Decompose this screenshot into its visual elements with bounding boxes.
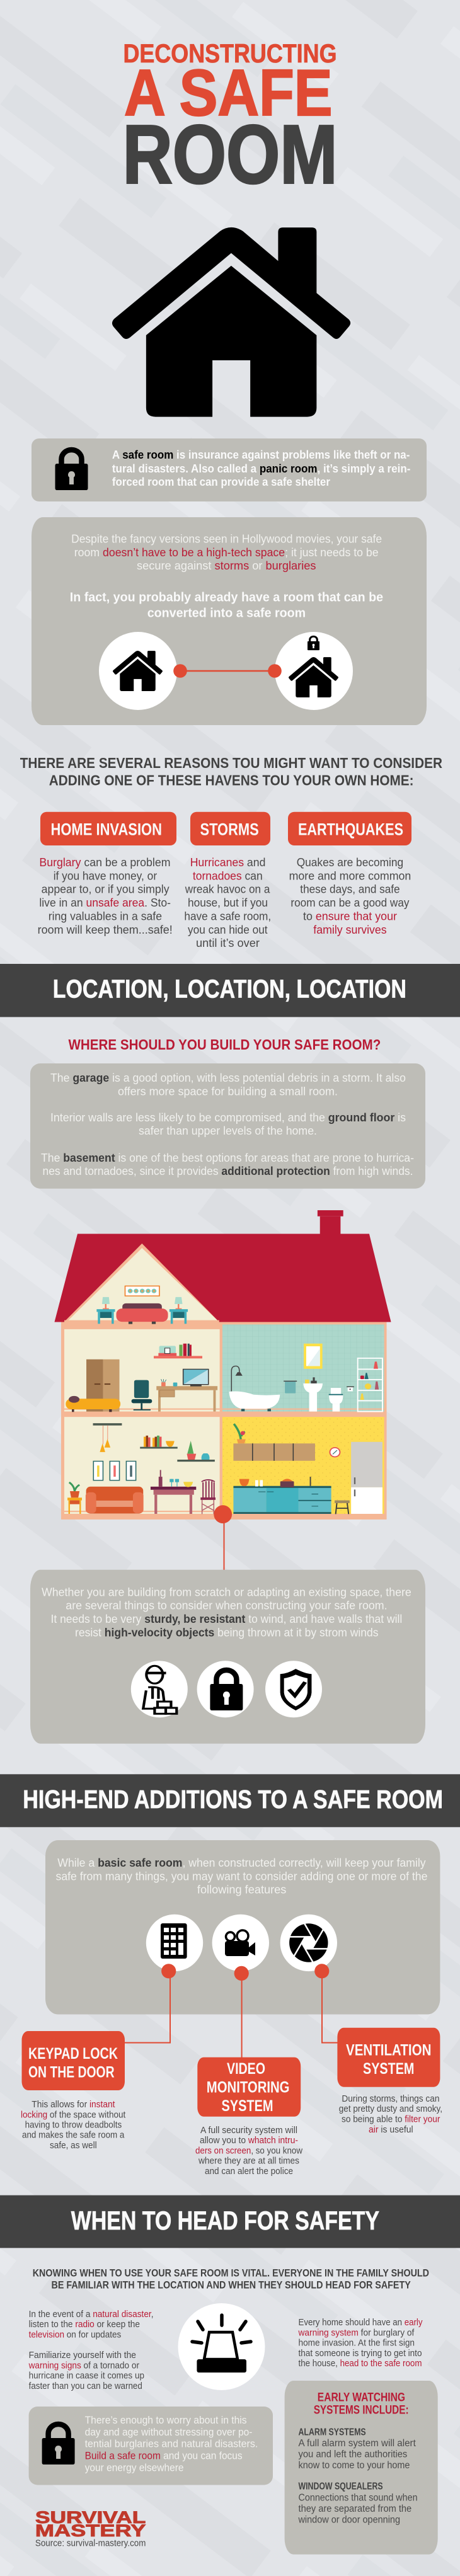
label box [197,2058,301,2117]
text: alarm systems: you and left the authorities [299,2449,408,2460]
text: hollywood paragraph [71,533,382,572]
text: burglary: live in an unsafe area. Sto- [39,896,171,909]
heading: EARLY WATCHING [318,2391,405,2404]
text: early warning advice: Every home should have an early [299,2318,423,2328]
title: DECONSTRUCTING [124,38,336,68]
text: burglary [38,856,173,936]
label box: MONITORING [207,2079,290,2097]
panel: video monitoring [195,2058,302,2177]
logo: survival mastery: MASTERY [35,2521,146,2540]
text: video: where they are at all times [198,2156,299,2166]
text: quakes: more and more common [289,869,411,883]
panel: safe room definition [32,438,427,501]
text: alarm systems: A full alarm system will alert [299,2438,416,2449]
label box: KEYPAD LOCK [28,2045,118,2063]
text: definition: tural disasters. Also called a panic room, it’s simply a rein- [112,462,410,475]
text: additions intro: While a basic safe room, when constructed correctly, will keep your family [57,1857,426,1869]
panel: storms [184,812,271,949]
panel: additions intro [45,1840,440,2015]
text: ventilation [339,2094,442,2135]
icon: keypad [146,1915,203,1971]
connectors: features [125,1964,338,2058]
button [288,812,411,845]
text: hollywood paragraph: room doesn’t have to be a high-tech space; it just needs to be [74,546,379,559]
text: hollywood paragraph: secure against storms or burglaries [137,559,316,572]
bathroom [229,1344,382,1412]
panel: early watching systems [285,2381,438,2555]
text: construction advice: resist high-velocity objects being thrown at it by strom winds [75,1626,379,1639]
icon: padlock [42,2424,75,2464]
panel: hollywood versions [32,517,427,725]
label box [21,2031,125,2090]
text: alarm systems: know to come to your home [299,2460,410,2471]
label box: SYSTEM [363,2060,414,2078]
section band: location [0,964,460,1017]
text: natural disaster advice: television on for updates [29,2330,121,2340]
icon: padlock [55,450,88,490]
panel: home invasion [38,812,176,936]
text: natural disaster advice: faster than you can be warned [29,2381,142,2391]
text: natural disaster advice: warning signs of a tornado or [28,2361,139,2371]
text: hurricanes: tornadoes can [193,869,263,883]
text: keypad: locking of the space without [21,2110,125,2120]
text: closing advice: Build a safe room and you can focus [85,2451,243,2462]
panel: earthquakes [288,812,411,936]
text: garage: The garage is a good option, with less potential debris in a storm. It also [50,1072,406,1084]
text: natural disaster advice: hurricane in caase it comes up [29,2371,144,2381]
text: video [195,2126,302,2177]
text: hurricanes: you can hide out [188,923,268,936]
text: quakes: these days, and safe [300,883,400,896]
text: hurricanes: Hurricanes and [190,856,265,869]
text: hollywood paragraph: Despite the fancy versions seen in Hollywood movies, your safe [71,533,382,546]
panel: where to build [30,1063,425,1189]
text: basement [41,1152,414,1177]
text: definition [112,449,410,488]
section band: when to head for safety [0,2195,460,2248]
kitchen [233,1424,382,1514]
text: keypad: and makes the safe room a [22,2131,125,2141]
button: STORMS [200,820,259,839]
logo: survival mastery [35,2508,146,2549]
icon: aperture vent [280,1915,337,1971]
text: closing advice: tential burglaries and natural disasters. [85,2438,258,2449]
title: A SAFE [124,57,333,130]
icon: builder [131,1661,188,1717]
text: hurricanes: house, but if you [188,896,268,909]
text: hurricanes: have a safe room, [184,910,271,922]
label box: VIDEO [227,2060,265,2078]
heading: where to build: WHERE SHOULD YOU BUILD YOUR SAFE ROOM? [68,1036,381,1053]
roof and chimney [54,1210,391,1322]
text: window squealers [298,2482,418,2526]
text: quakes: Quakes are becoming [297,856,403,869]
text: alarm systems [299,2427,416,2471]
text: quakes: room can be a good way [290,896,410,909]
text: keypad: having to throw deadbolts [25,2120,122,2130]
text: ventilation: get pretty dusty and smoky, [339,2104,442,2114]
text: additions intro: safe from many things, you may want to consider adding one or more of the [55,1870,427,1882]
text: additions intro: following features [197,1884,286,1896]
text: burglary: ring valuables in a safe [49,910,162,922]
text: video: and can alert the police [205,2167,293,2177]
text: video: ders on screen, so you know [195,2146,302,2156]
button [40,812,176,845]
text: window squealers: window or door openning [298,2515,400,2526]
connector: house to construction panel [214,1505,232,1570]
text: ventilation: air is useful [369,2125,413,2135]
text: early warning advice: warning system for burglary of [298,2328,415,2338]
text: keypad: This allows for instant [32,2100,115,2110]
text: keypad: safe, as well [50,2141,97,2151]
panel: keypad lock [21,2031,125,2151]
text: interior walls: Interior walls are less likely to be compromised, and the ground floor is [50,1111,406,1124]
heading: knowing when [33,2267,429,2291]
icon: siren [178,2303,265,2390]
text: ventilation: so being able to filter your [342,2114,440,2124]
text: burglary: if you have money, or [54,869,157,883]
text: hurricanes: until it’s over [196,936,260,949]
text: alarm systems: ALARM SYSTEMS [299,2427,366,2438]
text: additions intro [55,1857,427,1896]
text: video: A full security system will [200,2126,297,2136]
text: hurricanes: wreak havoc on a [185,883,270,896]
text: definition: forced room that can provide a safe shelter [112,476,330,488]
icon: large house [112,227,350,417]
text: quakes: family survives [313,923,387,936]
section band: when to head for safety: WHEN TO HEAD FOR SAFETY [71,2206,379,2235]
text: quakes: to ensure that your [303,910,397,922]
text: natural disaster advice [28,2310,154,2391]
text: early warning advice: home invasion. At the first sign [299,2338,415,2349]
text: closing advice: There’s enough to worry about in this [85,2415,247,2426]
icon: house to safe house connector [99,632,353,710]
text: keypad [21,2100,125,2151]
icon: padlock [197,1661,254,1717]
text: construction advice: are several things to consider when constructing your safe room. [66,1600,388,1612]
label box [337,2028,440,2087]
living room [67,1423,216,1514]
text: burglary: room will keep them...safe! [38,923,173,936]
text: early warning advice: that someone is trying to get into [299,2349,422,2359]
label box: ON THE DOOR [28,2063,115,2081]
panel: ventilation [337,2028,442,2135]
office [66,1344,217,1412]
text: ventilation: During storms, things can [342,2094,440,2104]
text: burglary: appear to, or if you simply [42,883,170,896]
attic bedroom [96,1286,188,1324]
text: window squealers: Connections that sound when [299,2492,418,2503]
illustration: house cross-section [54,1210,391,1520]
title: ROOM [123,108,338,200]
heading: reasons: ADDING ONE OF THESE HAVENS TOU YOUR OWN HOME: [49,772,414,789]
button [190,812,270,845]
text: basement: The basement is one of the best options for areas that are prone to hurrica- [41,1152,414,1164]
heading: SYSTEMS INCLUDE: [314,2404,409,2417]
text: natural disaster advice: listen to the radio or keep the [29,2320,140,2330]
source: Source: survival-mastery.com [35,2539,146,2549]
text: construction advice [42,1586,411,1639]
panel: build a safe room [29,2407,273,2485]
label box: VENTILATION [346,2042,431,2059]
text: closing advice: your energy elsewhere [85,2462,184,2473]
text: garage: offers more space for building a small room. [118,1085,338,1097]
text: in fact: converted into a safe room [147,605,306,620]
text: closing advice [85,2415,258,2473]
title [123,38,338,200]
walls and rooms [61,1244,387,1520]
text: interior walls [50,1111,406,1137]
button: HOME INVASION [50,820,162,839]
text: in fact: In fact, you probably already have a room that can be [70,590,383,604]
text: construction advice: It needs to be very sturdy, be resistant to wind, and have walls that will [50,1613,402,1625]
text: early warning advice [298,2318,423,2369]
text: window squealers: they are separated from the [299,2504,411,2514]
text: garage [50,1072,406,1097]
text: quakes [289,856,411,936]
text: video: allow you to whatch intru- [200,2136,298,2146]
text: basement: nes and tornadoes, since it provides additional protection from high winds. [43,1165,413,1177]
heading: reasons [20,755,442,789]
text: construction advice: Whether you are building from scratch or adapting an existing space, there [42,1586,411,1598]
section band: high-end additions [0,1774,460,1827]
text: interior walls: safer than upper levels of the home. [139,1125,317,1137]
heading [314,2391,409,2417]
text: early warning advice: the house, head to the safe room [299,2359,422,2369]
logo: survival mastery: SURVIVAL [35,2508,146,2527]
text: natural disaster advice: In the event of a natural disaster, [29,2310,154,2320]
text: burglary: Burglary can be a problem [39,856,171,869]
button: EARTHQUAKES [298,820,403,839]
text: natural disaster advice: Familiarize yourself with the [29,2350,136,2361]
text: window squealers: WINDOW SQUEALERS [299,2482,383,2492]
panel: construction [30,1570,425,1744]
label box: SYSTEM [222,2097,273,2115]
icon: shield [265,1661,322,1717]
icon: video camera [212,1915,269,1971]
text: hurricanes [184,856,271,949]
text: closing advice: day and age without stressing over po- [85,2427,252,2438]
text: in fact [70,590,383,620]
text: definition: A safe room is insurance against problems like theft or na- [112,449,410,461]
